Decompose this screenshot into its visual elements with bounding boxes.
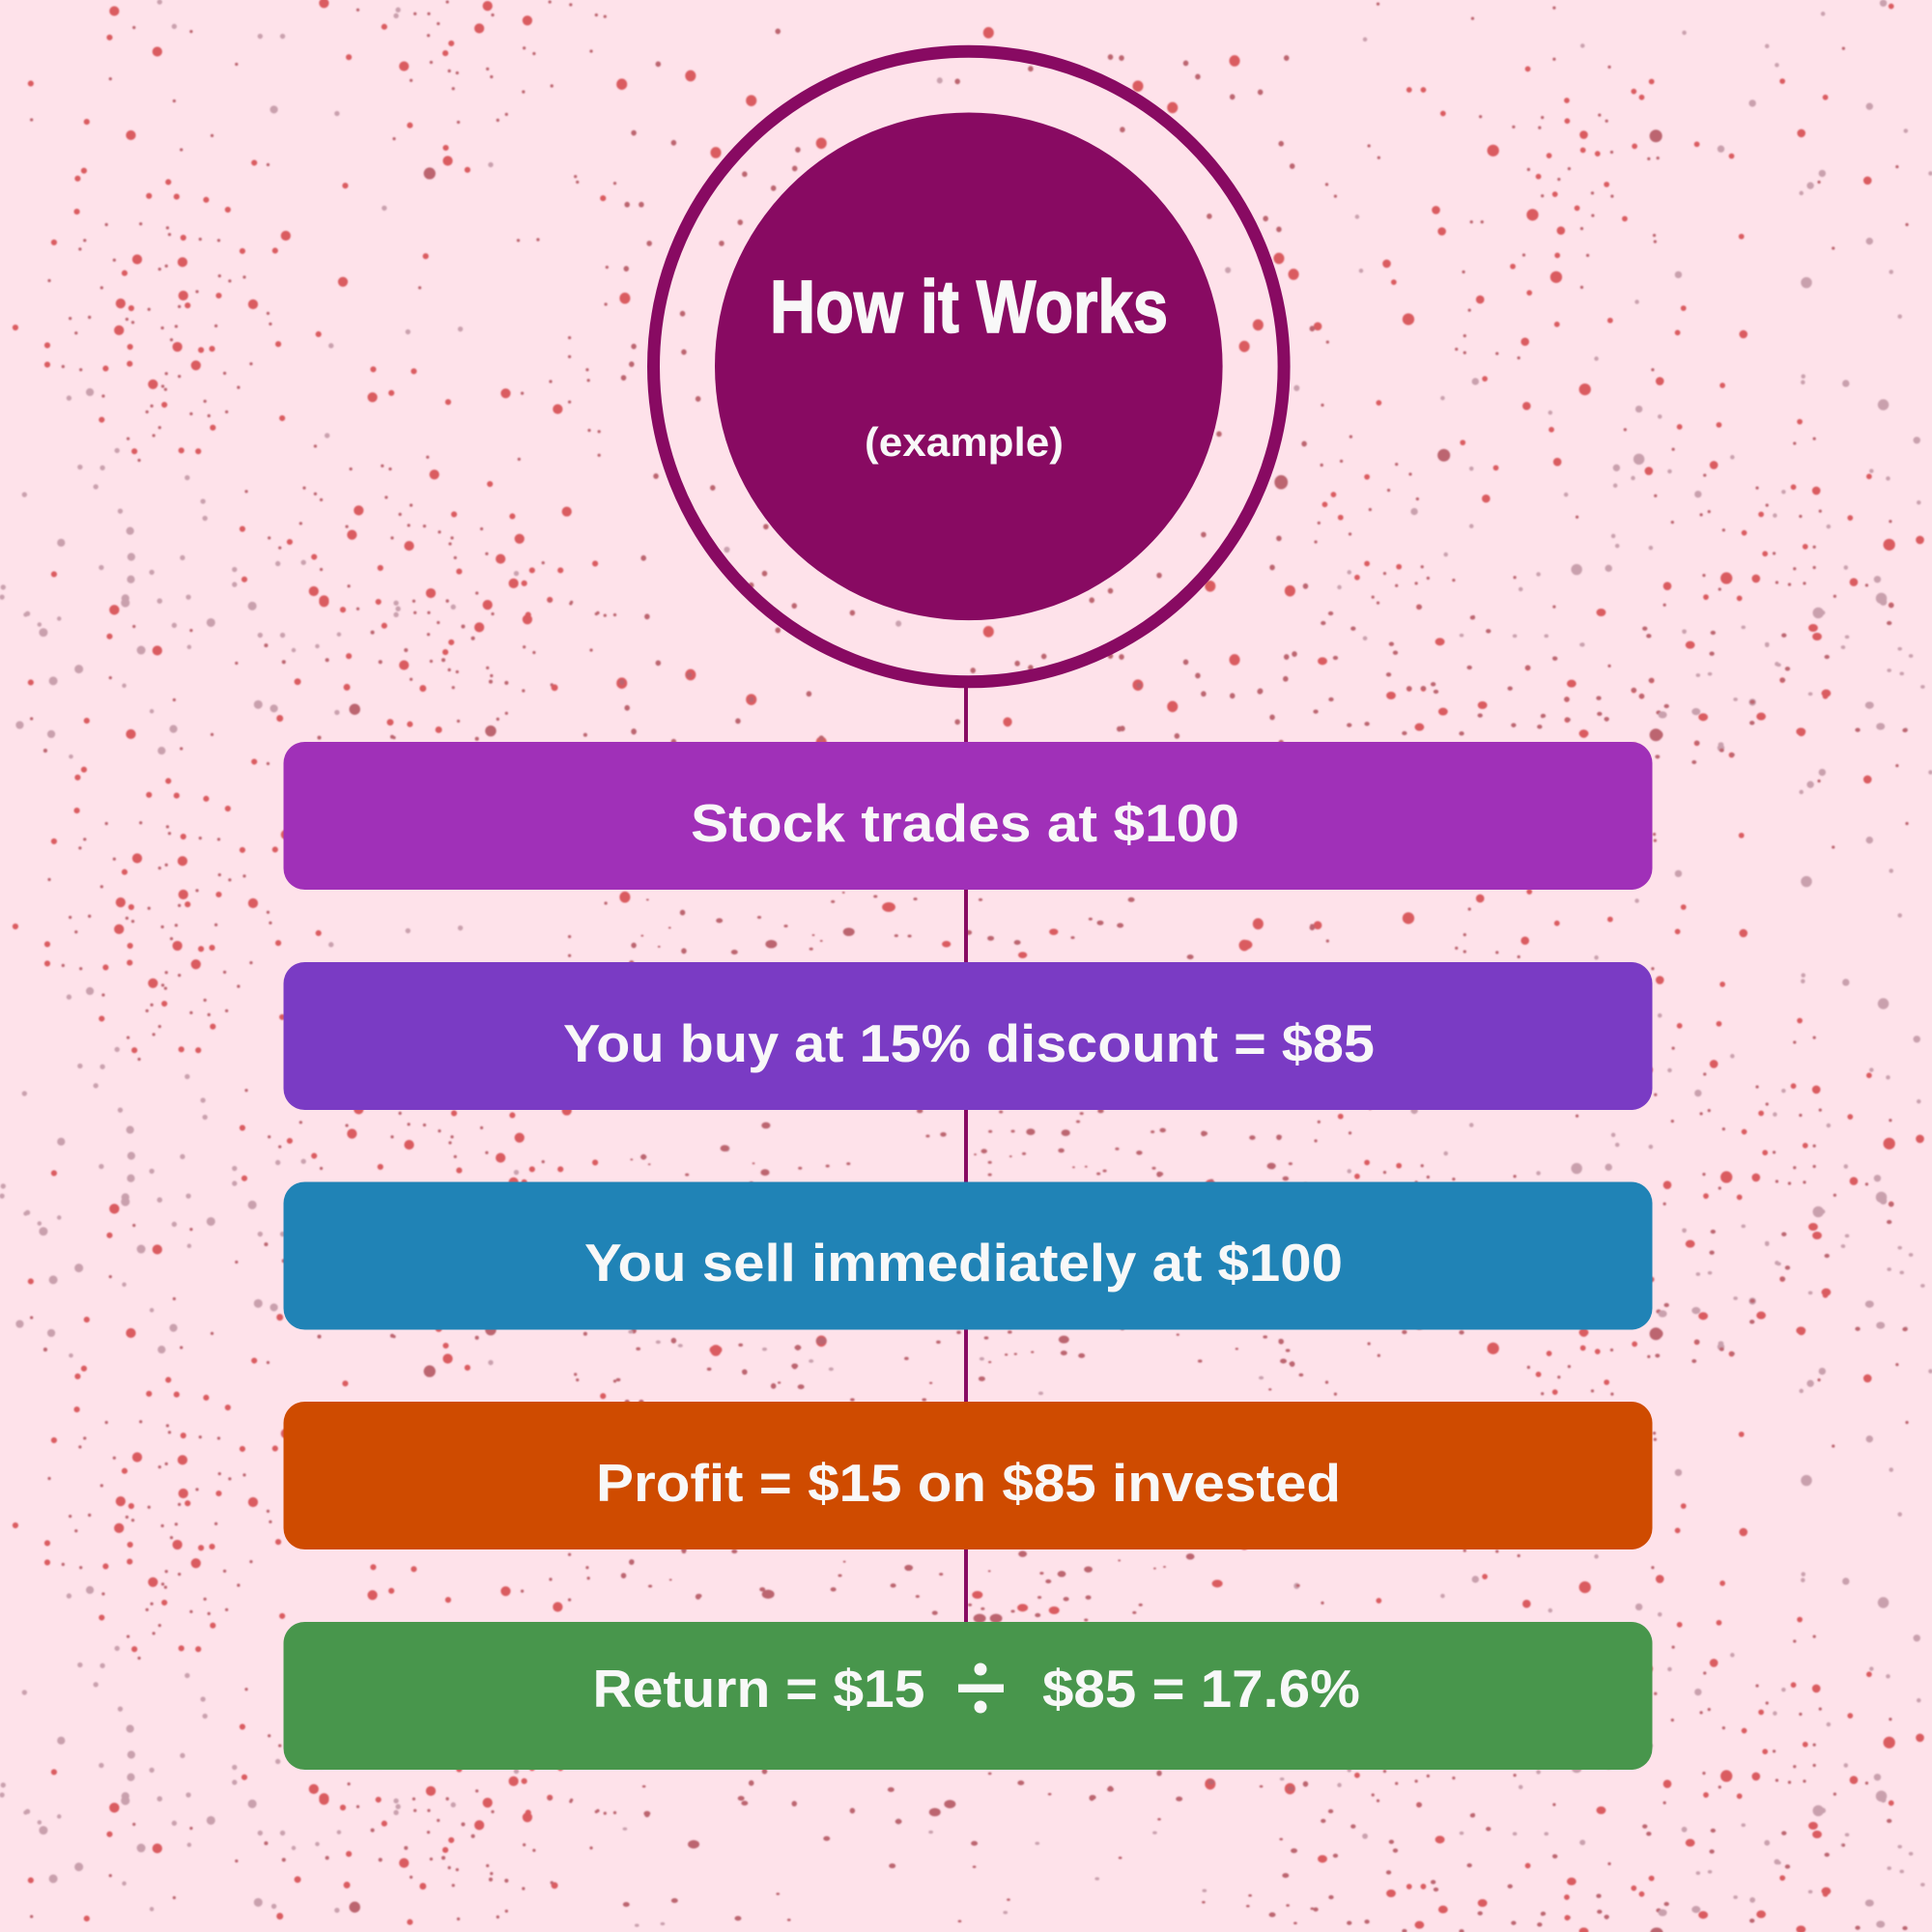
icon: division sign bbox=[958, 1663, 1004, 1714]
subtitle: (example) bbox=[865, 419, 1064, 465]
step 5 bar: Return = $15 bbox=[593, 1659, 925, 1719]
step 1 bar: Stock trades at $100 bbox=[691, 793, 1239, 853]
outer ring bbox=[653, 51, 1284, 682]
step 2 bar: You buy at 15% discount = $85 bbox=[563, 1013, 1375, 1073]
step 3 bar bbox=[284, 1182, 1652, 1329]
connector line bbox=[964, 688, 968, 1623]
step 4 bar bbox=[284, 1402, 1652, 1549]
step 5 bar bbox=[284, 1622, 1652, 1770]
step 4 bar: Profit = $15 on $85 invested bbox=[596, 1453, 1341, 1513]
step 2 bar bbox=[284, 962, 1652, 1110]
step 5 bar: $85 = 17.6% bbox=[1042, 1659, 1360, 1719]
title: How it Works bbox=[770, 266, 1168, 349]
title badge bbox=[715, 112, 1223, 620]
step 3 bar: You sell immediately at $100 bbox=[584, 1233, 1343, 1293]
step 1 bar bbox=[284, 742, 1652, 890]
